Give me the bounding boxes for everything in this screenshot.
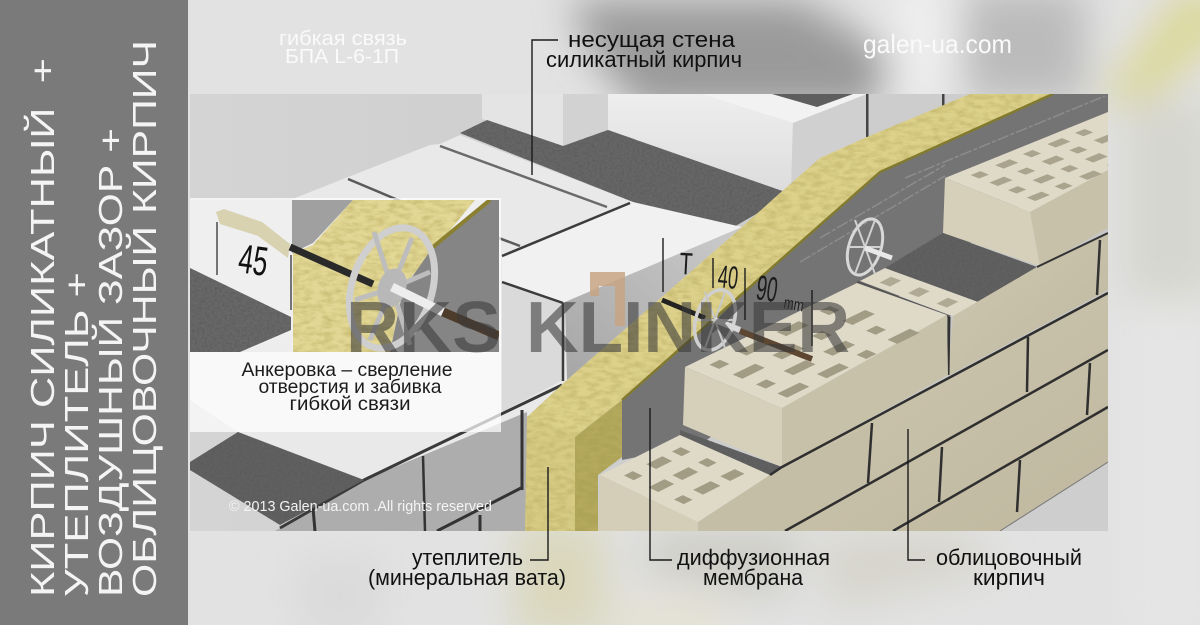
- dimension lines and values: 90: [754, 268, 780, 310]
- dimension lines and values: [663, 238, 812, 346]
- vertical title: ВОЗДУШНЫЙ ЗАЗОР +: [92, 128, 129, 597]
- top brick: [943, 112, 1108, 265]
- second brick: [857, 233, 1108, 376]
- label: diffusion membrane: [650, 408, 830, 590]
- watermark: RKS KLINKER: KLINKER: [526, 288, 850, 368]
- facing bricks: [598, 112, 1154, 531]
- anchor plug: [216, 209, 290, 258]
- label: flexible tie: гибкая связь: [279, 28, 407, 50]
- lower courses: [760, 293, 1108, 531]
- upper anchor and washer: [846, 217, 893, 277]
- label: flexible tie: [279, 28, 407, 68]
- inset: anchoring detail: [190, 198, 501, 432]
- label: insulation: (минеральная вата): [368, 565, 566, 590]
- label: facing brick: облицовочный: [936, 545, 1082, 570]
- dimension lines and values: T: [679, 246, 693, 282]
- left title panel: [0, 0, 188, 625]
- brick joints: [770, 293, 1108, 531]
- main wall cross-section illustration: [190, 94, 1154, 531]
- lower-left mortar: [680, 430, 782, 477]
- washer: [346, 224, 438, 352]
- mortar bed, front: [190, 432, 364, 525]
- grey side faces of silicate blocks: [275, 227, 742, 531]
- main brick: [683, 283, 948, 467]
- mortar bed, back: [460, 120, 791, 232]
- dimension lines and values: 40: [716, 258, 740, 296]
- label: diffusion membrane: диффузионная: [677, 545, 830, 570]
- dimension lines and values: mm: [782, 293, 805, 315]
- silicate blocks at the back: [482, 94, 944, 191]
- lower-left brick: [598, 435, 782, 531]
- label: load-bearing wall: несущая стена: [568, 27, 736, 52]
- label: load-bearing wall: [532, 27, 742, 175]
- inset picture: [190, 200, 499, 359]
- label: flexible tie: БПА L-6-1П: [285, 46, 399, 68]
- inset caption: [242, 359, 452, 415]
- vertical title: КИРПИЧ СИЛИКАТНЫЙ +: [24, 58, 61, 597]
- dimension 45: 45: [236, 235, 271, 285]
- label: insulation: [368, 467, 566, 590]
- label: load-bearing wall: силикатный кирпич: [546, 47, 742, 72]
- label: diffusion membrane: мембрана: [703, 565, 804, 590]
- inset caption: гибкой связи: [290, 393, 410, 415]
- white top faces: [190, 135, 742, 480]
- label: facing brick: кирпич: [973, 565, 1045, 590]
- dimension 45: [217, 222, 291, 310]
- inset backing: [190, 198, 501, 432]
- vertical title: УТЕПЛИТЕЛЬ +: [58, 272, 95, 597]
- mortar on upper course: [885, 233, 1037, 302]
- vertical title: ОБЛИЦОВОЧНЫЙ КИРПИЧ: [126, 40, 163, 597]
- watermark: RKS KLINKER: RKS: [346, 288, 501, 368]
- membrane: [622, 94, 1108, 460]
- main anchor and washer: [662, 285, 812, 359]
- watermark: RKS KLINKER: [346, 272, 850, 368]
- mineral wool: [525, 94, 1053, 531]
- label: facing brick: [908, 429, 1082, 590]
- floor at right: [1000, 440, 1108, 531]
- copyright: © 2013 Galen-ua.com .All rights reserved: [229, 498, 492, 515]
- inset caption: Анкеровка – сверление: [242, 359, 452, 381]
- vertical title: [24, 40, 163, 597]
- inset caption: отверстия и забивка: [258, 376, 442, 398]
- site name: galen-ua.com: [863, 29, 1012, 59]
- label: insulation: утеплитель: [412, 545, 523, 570]
